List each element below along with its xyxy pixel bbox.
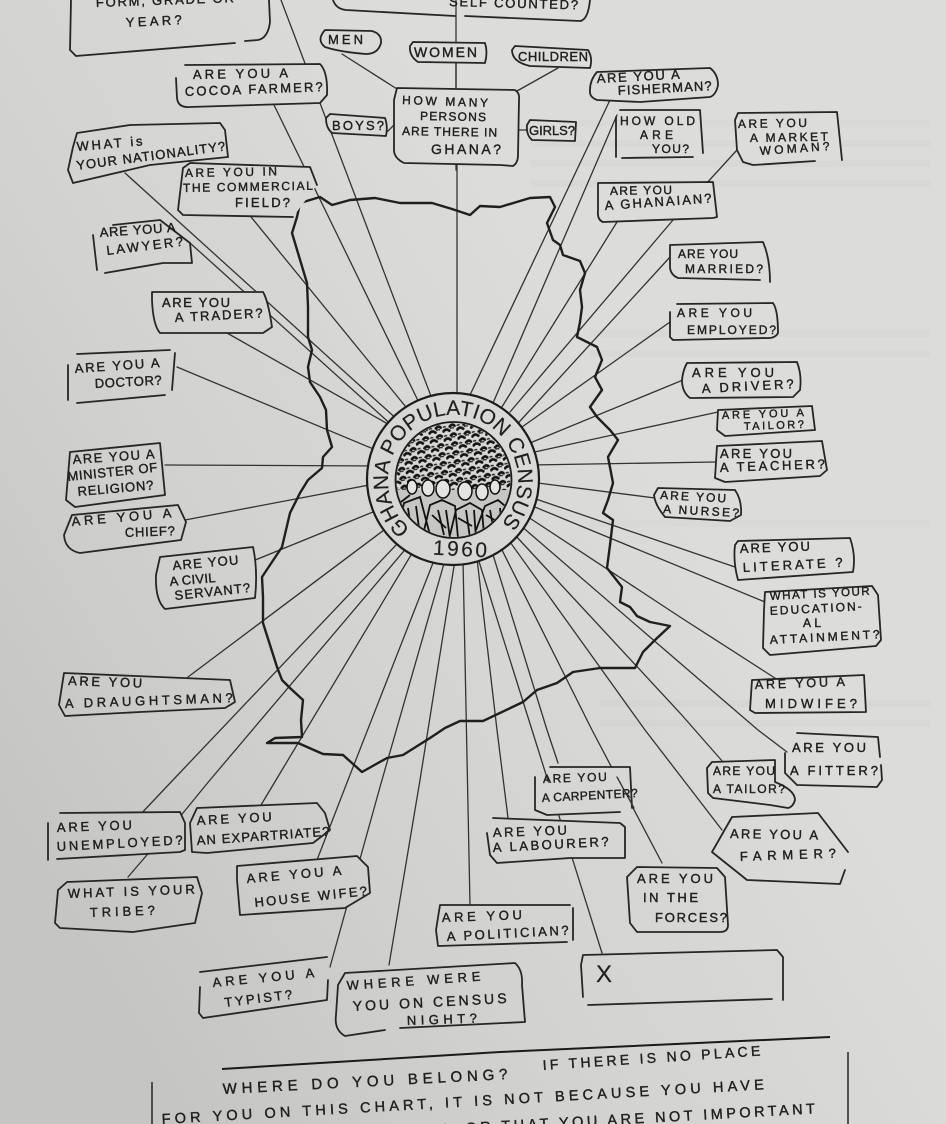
box: tribe: WHAT IS YOUR (68, 882, 195, 901)
box: how many persons are there in Ghana: HOW MANY (402, 93, 488, 110)
box: labourer: A LABOURER? (492, 834, 609, 855)
box: expatriate: AN EXPARTRIATE? (196, 824, 330, 848)
box: farmer: FARMER? (740, 846, 836, 864)
box: draughtsman: A DRAUGHTSMAN? (65, 690, 233, 711)
box: in the forces: IN THE (643, 890, 698, 905)
box: driver: A DRIVER? (701, 376, 794, 396)
box: doctor: DOCTOR? (94, 373, 162, 391)
box: trader: ARE YOU (162, 295, 230, 310)
box: cocoa farmer (176, 64, 327, 107)
box: house wife: HOUSE WIFE? (254, 883, 368, 910)
connectors to how many persons box (342, 54, 558, 132)
box: draughtsman: ARE YOU (68, 673, 142, 691)
box: tailor bottom: ARE YOU (713, 764, 775, 778)
box: literate: LITERATE ? (742, 555, 843, 575)
box: driver (682, 362, 801, 398)
box: educational attainment (763, 586, 881, 655)
box: civil servant: ARE YOU (172, 552, 239, 573)
box: market woman: WOMAN? (759, 139, 830, 158)
box: tailor bottom: A TAILOR? (713, 782, 785, 796)
box: nurse: ARE YOU (660, 488, 726, 505)
box: where were you on census night: YOU ON CENSUS (352, 990, 507, 1014)
box: tribe (55, 877, 202, 932)
box: fisherman: FISHERMAN? (617, 78, 712, 98)
box: fisherman (590, 67, 718, 102)
box: politician (436, 905, 573, 946)
box: farmer (712, 813, 848, 884)
box: minister of religion: RELIGION? (77, 477, 154, 499)
box: Ghanaian: ARE YOU (610, 183, 672, 198)
box: chief: CHIEF? (125, 523, 175, 540)
box: nationality (68, 123, 228, 183)
box: trader (152, 292, 272, 333)
box: carpenter: A CARPENTER? (541, 786, 638, 805)
box: how many persons are there in Ghana: ARE THERE IN (402, 124, 497, 140)
box: where were you on census night (336, 963, 525, 1036)
box: boys: BOYS? (332, 118, 384, 133)
box: carpenter (535, 767, 638, 815)
box: employed (670, 303, 778, 340)
box: employed: ARE YOU (677, 306, 752, 320)
box: tailor top: TAILOR? (744, 419, 804, 433)
box: women: WOMEN (414, 44, 477, 60)
box: girls (527, 120, 576, 141)
note: where do you belong: WHERE DO YOU BELONG? (222, 1066, 508, 1098)
box: civil servant: SERVANT? (174, 580, 251, 603)
box: how old are you: HOW OLD (620, 114, 695, 128)
census seal (366, 392, 540, 566)
box: commercial field: THE COMMERCIAL (183, 179, 313, 195)
box: men (320, 30, 381, 54)
box: girls: GIRLS? (529, 123, 575, 138)
box: fitter (785, 733, 882, 787)
box: chief: ARE YOU A (71, 505, 172, 529)
box: politician: ARE YOU (442, 907, 522, 925)
box: teacher (715, 441, 827, 482)
box: house wife (237, 856, 370, 915)
box: minister of religion (66, 443, 165, 507)
box: farmer: ARE YOU A (730, 826, 819, 843)
box: labourer (487, 818, 625, 863)
box: women (410, 42, 486, 63)
box: in the forces: ARE YOU (637, 871, 713, 886)
box: how old are you: YOU? (652, 142, 689, 156)
box: midwife: MIDWIFE? (765, 696, 857, 711)
box: where were you on census night: NIGHT? (407, 1011, 477, 1028)
box: minister of religion: MINISTER OF (67, 460, 158, 484)
box: civil servant (156, 547, 256, 609)
box: expatriate (190, 803, 330, 853)
box: in the forces: FORCES? (655, 910, 727, 925)
ray crossing the carpenter box (617, 777, 634, 808)
box: tailor top: ARE YOU A (722, 407, 805, 422)
box: Ghanaian (598, 182, 717, 222)
box: doctor: ARE YOU A (74, 355, 160, 376)
box: married: ARE YOU (678, 247, 738, 261)
box: educational attainment: ATTAINMENT? (769, 627, 880, 647)
box: literate (734, 538, 854, 580)
box: fitter: A FITTER? (790, 763, 878, 778)
box: in the forces (627, 867, 728, 932)
box: typist (199, 957, 328, 1018)
box: market woman (735, 112, 842, 165)
box: X blank space for you (581, 950, 783, 1005)
box: self counted (333, 0, 590, 21)
box: tailor bottom (707, 760, 795, 808)
box: form, grade or year: YEAR? (125, 12, 182, 30)
box: how old are you (616, 110, 703, 158)
box: unemployed (48, 812, 185, 860)
box: nationality: YOUR NATIONALITY? (75, 139, 226, 173)
box: lawyer (93, 220, 192, 273)
box: draughtsman (59, 673, 235, 716)
box: how many persons are there in Ghana: GHANA? (431, 141, 501, 157)
box: cocoa farmer: COCOA FARMER? (185, 79, 323, 99)
box: house wife: ARE YOU A (246, 863, 342, 886)
box: where were you on census night: WHERE WERE (346, 969, 481, 993)
box: unemployed: ARE YOU (57, 817, 132, 835)
seal: circular title: GHANA POPULATION CENSUS (373, 400, 533, 536)
box: chief (64, 505, 186, 553)
box: fitter: ARE YOU (792, 740, 866, 755)
box: expatriate: ARE YOU (196, 809, 272, 828)
box: trader: A TRADER? (174, 305, 263, 325)
box: employed: EMPLOYED? (687, 323, 776, 337)
box: minister of religion: ARE YOU A (72, 446, 155, 467)
box: carpenter: ARE YOU (543, 770, 607, 786)
box: teacher: ARE YOU (720, 446, 792, 461)
box: Ghanaian: A GHANAIAN? (604, 191, 712, 213)
box: market woman: A MARKET (750, 130, 829, 145)
box: labourer: ARE YOU (493, 822, 567, 840)
note: where do you belong: IF THERE IS NO PLACE (542, 1043, 761, 1073)
box: fisherman: ARE YOU A (596, 67, 680, 86)
seal: crowd illustration (395, 422, 513, 540)
box: how old are you: ARE (640, 128, 673, 142)
box: tribe: TRIBE? (90, 903, 155, 920)
radiating lines from census seal (125, 0, 787, 967)
box: commercial field (178, 163, 317, 217)
box: form, grade or year (70, 0, 270, 56)
box: civil servant: A CIVIL (169, 570, 216, 589)
box: nurse: A NURSE? (663, 502, 740, 520)
box: midwife (750, 675, 866, 713)
box: educational attainment: EDUCATION- (769, 599, 862, 618)
box: driver: ARE YOU (692, 365, 774, 380)
box: lawyer: ARE YOU A (99, 220, 176, 240)
box: tailor top (717, 406, 815, 436)
map of Ghana outline (262, 197, 670, 772)
box: doctor (68, 350, 175, 403)
box: children (512, 46, 591, 68)
box: midwife: ARE YOU A (755, 675, 846, 692)
box: commercial field: ARE YOU IN (185, 164, 277, 180)
box: commercial field: FIELD? (235, 195, 290, 210)
box: men: MEN (328, 32, 363, 47)
box: typist: TYPIST? (224, 987, 293, 1010)
box: boys (326, 114, 387, 136)
box: market woman: ARE YOU (738, 116, 807, 131)
note: where do you belong (152, 1037, 848, 1124)
box: nurse (654, 488, 741, 521)
box: politician: A POLITICIAN? (446, 923, 569, 944)
seal: year: 1960 (432, 537, 488, 562)
box: children: CHILDREN (518, 49, 588, 64)
box: X blank space for you: X (596, 961, 612, 988)
box: educational attainment: WHAT IS YOUR (770, 586, 870, 603)
box: typist: ARE YOU A (212, 965, 315, 990)
box: married (670, 242, 770, 282)
box: nationality: WHAT is (76, 133, 144, 154)
box: educational attainment: AL (803, 616, 821, 630)
box: how many persons are there in Ghana (394, 88, 519, 166)
box: lawyer: LAWYER? (106, 234, 184, 258)
box: literate: ARE YOU (740, 539, 810, 556)
box: how many persons are there in Ghana: PERSONS (420, 109, 486, 124)
box: teacher: A TEACHER? (720, 456, 825, 475)
box: married: MARRIED? (685, 262, 763, 276)
box: cocoa farmer: ARE YOU A (193, 65, 288, 82)
box: unemployed: UNEMPLOYED? (56, 832, 183, 854)
